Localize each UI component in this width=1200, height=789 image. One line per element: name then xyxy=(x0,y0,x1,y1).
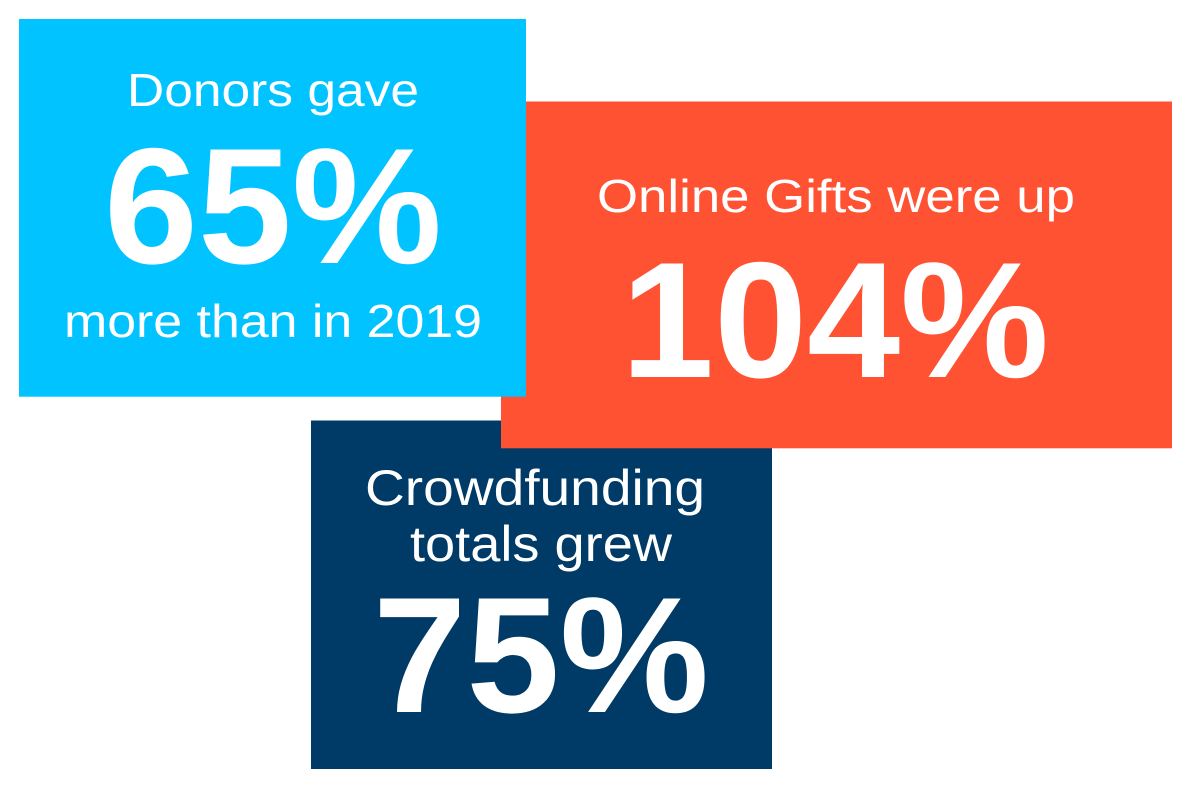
stat: 75%: 75% xyxy=(373,563,709,747)
panel: online gifts xyxy=(501,102,1172,448)
stat: 65%: 65% xyxy=(104,114,442,298)
panel: crowdfunding xyxy=(311,420,772,769)
text: online gifts label: Online Gifts were up xyxy=(597,170,1075,222)
panel: donors xyxy=(19,19,526,397)
text: compared to 2019: more than in 2019 xyxy=(64,295,482,347)
text: crowdfunding label line 2: totals grew xyxy=(410,516,673,572)
stat: 104%: 104% xyxy=(621,228,1049,412)
text: donors label: Donors gave xyxy=(127,64,419,116)
text: crowdfunding label line 1: Crowdfunding xyxy=(365,460,705,516)
